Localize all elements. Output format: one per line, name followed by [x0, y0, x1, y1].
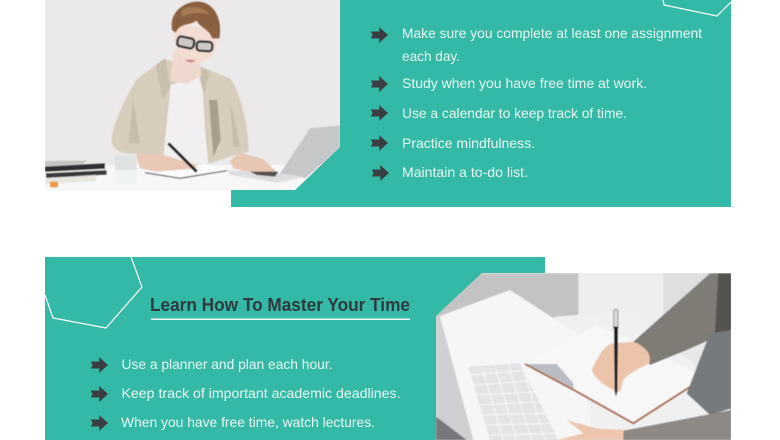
icon: arrow 1	[91, 357, 108, 373]
icon: arrow 3	[371, 105, 388, 121]
tip: mindfulness: Practice mindfulness.	[402, 135, 535, 151]
icon: arrow 3	[91, 415, 108, 431]
icon: arrow 2	[371, 76, 388, 92]
tip: complete one assignment: Make sure you complete at least one assignment	[402, 25, 702, 41]
panel: top teal panel	[231, 0, 731, 207]
tip: complete one assignment: each day.	[402, 48, 460, 64]
arrow list: top tips	[371, 25, 702, 181]
tip: academic deadlines: Keep track of important academic deadlines.	[122, 385, 400, 401]
tip: to-do list: Maintain a to-do list.	[402, 164, 528, 180]
panel: lower teal panel	[45, 257, 545, 440]
tip: calendar: Use a calendar to keep track of time.	[402, 105, 627, 121]
arrow list: lower tips	[91, 356, 400, 431]
tip: study at work: Study when you have free time at work.	[402, 75, 647, 91]
icon: arrow 4	[371, 135, 388, 151]
photo: hand writing in a notebook beside a keyboard	[436, 273, 731, 440]
heading: Learn How To Master Your Time: Learn How To Master Your Time	[150, 295, 410, 315]
icon: arrow 2	[91, 386, 108, 402]
decorative hexagon outline, lower panel	[45, 257, 142, 328]
icon: arrow 1	[371, 27, 388, 43]
tip: planner: Use a planner and plan each hour.	[122, 356, 332, 372]
photo: student writing at a desk with laptop	[45, 0, 340, 190]
icon: arrow 5	[372, 165, 389, 181]
tip: watch lectures: When you have free time, watch lectures.	[121, 414, 375, 430]
tip: complete one assignment	[402, 25, 702, 64]
decorative hexagon outline, top panel	[663, 0, 731, 16]
